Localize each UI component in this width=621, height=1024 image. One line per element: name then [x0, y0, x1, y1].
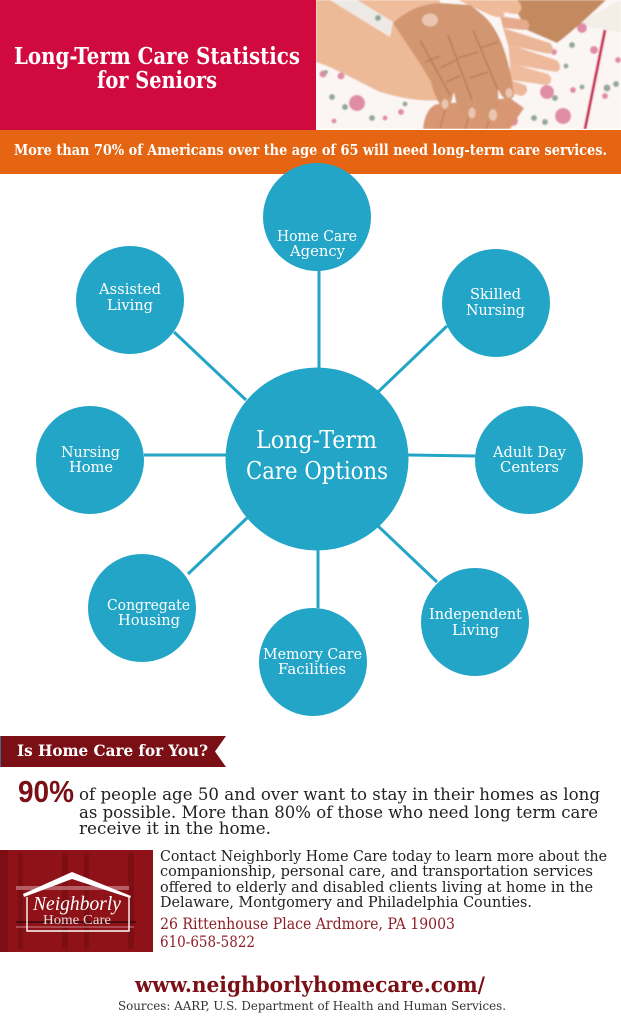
node: nursing home: [36, 406, 144, 514]
node: congregate housing: Congregate: [107, 598, 190, 614]
lower hand fingers: [423, 98, 524, 129]
node: congregate housing: [88, 554, 196, 662]
contact paragraph: Contact Neighborly Home Care today to learn more about the: [160, 847, 607, 865]
node: skilled nursing: Skilled: [470, 287, 521, 303]
node: assisted living: Assisted: [98, 282, 161, 298]
title: for Seniors: [97, 67, 217, 94]
node: adult day centers: Adult Day: [492, 445, 567, 461]
logo: neighborly home care: Neighborly: [32, 893, 121, 915]
hub: long-term care options: [226, 368, 408, 550]
node: memory care facilities: [259, 608, 367, 716]
node: nursing home: Nursing: [61, 445, 120, 461]
node: skilled nursing: [442, 249, 550, 357]
node: assisted living: Living: [107, 298, 153, 314]
sources: Sources: AARP, U.S. Department of Health and Human Services.: [118, 999, 506, 1013]
right fingers: [500, 16, 529, 30]
hub: long-term care options: Care Options: [246, 457, 388, 485]
statistic text: as possible. More than 80% of those who need long term care: [79, 803, 598, 823]
statistic text: [79, 785, 600, 839]
header panel: [0, 0, 316, 130]
section ribbon: is home care for you: Is Home Care for You?: [17, 741, 208, 760]
gown piping: [585, 30, 605, 129]
node: independent living: [421, 568, 529, 676]
node: congregate housing: Housing: [118, 613, 180, 629]
website url: www.neighborlyhomecare.com/: [134, 972, 485, 997]
contact paragraph: companionship, personal care, and transportation services: [160, 862, 593, 880]
upper young fingers: [357, 0, 440, 27]
top right wrist: [510, 0, 606, 43]
node: assisted living: [76, 246, 184, 354]
node: independent living: Independent: [429, 607, 522, 623]
photo: stacked hands on floral gown: [316, 0, 621, 129]
carer forearm: [316, 0, 445, 101]
title: [14, 43, 300, 94]
statistic: 90 percent: 90%: [18, 774, 74, 809]
contact paragraph: offered to elderly and disabled clients living at home in the: [160, 878, 593, 896]
node: adult day centers: [475, 406, 583, 514]
hub: long-term care options: Long-Term: [256, 426, 377, 454]
node: memory care facilities: Facilities: [278, 662, 346, 678]
subtitle banner: [0, 130, 621, 174]
address and phone: 610-658-5822: [160, 933, 255, 951]
connector lines: [144, 270, 476, 608]
node: home care agency: Agency: [289, 244, 346, 260]
node: adult day centers: Centers: [500, 460, 559, 476]
contact paragraph: Delaware, Montgomery and Philadelphia Counties.: [160, 893, 532, 911]
statistic: 90 percent: [18, 774, 600, 839]
node: skilled nursing: Nursing: [466, 303, 525, 319]
contact paragraph: [160, 847, 607, 911]
logo: neighborly home care: [0, 850, 153, 952]
address and phone: 26 Rittenhouse Place Ardmore, PA 19003: [160, 915, 455, 933]
statistic text: receive it in the home.: [79, 819, 271, 839]
elderly hand: [393, 3, 514, 122]
diagram: long-term care options: [36, 163, 583, 716]
node: home care agency: Home Care: [277, 229, 357, 245]
title: Long-Term Care Statistics: [14, 43, 300, 70]
floral print: [320, 23, 621, 126]
node: home care agency: [263, 163, 371, 271]
node: memory care facilities: Memory Care: [263, 647, 362, 663]
section ribbon: is home care for you: [0, 736, 226, 767]
statistic text: of people age 50 and over want to stay in their homes as long: [79, 785, 600, 805]
node: nursing home: Home: [69, 460, 113, 476]
logo: neighborly home care: Home Care: [43, 913, 111, 928]
node: independent living: Living: [452, 623, 499, 639]
address and phone: [160, 915, 455, 951]
